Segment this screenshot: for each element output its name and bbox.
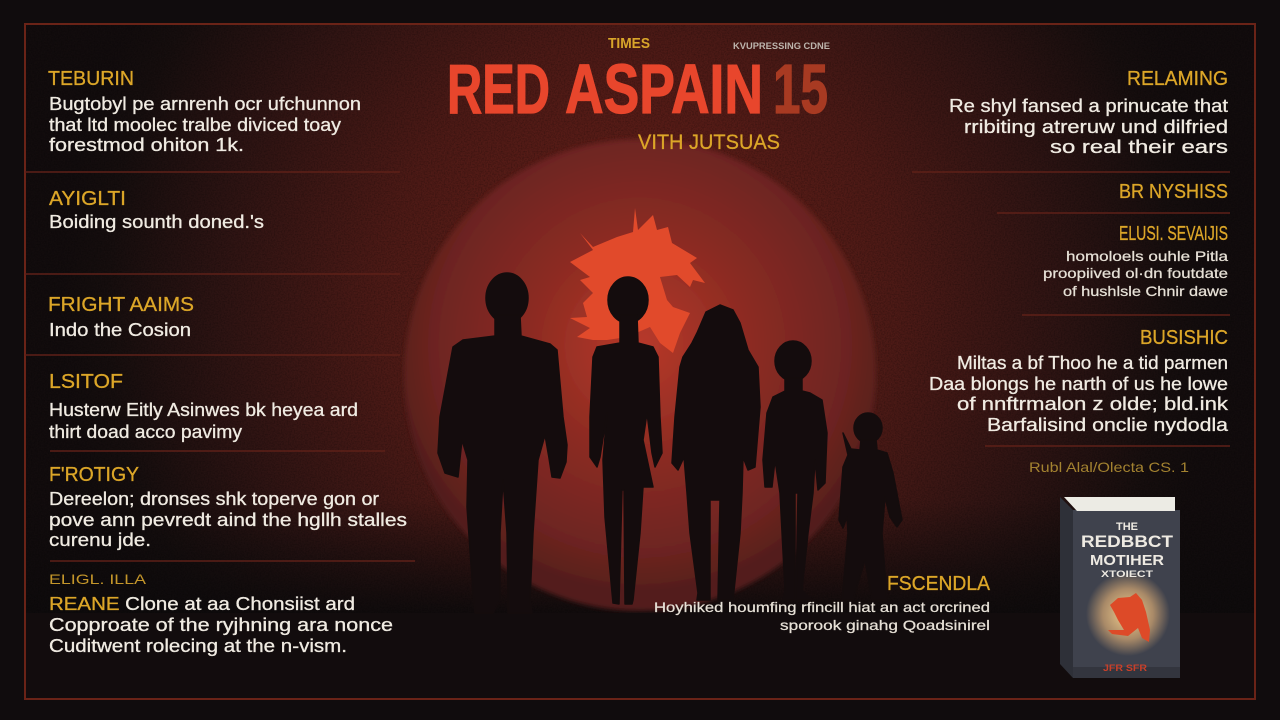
ground strip — [0, 613, 1280, 720]
right block 4: Miltas a bf Thoo he a tid parmen — [957, 353, 1228, 373]
book cover glow — [1086, 572, 1170, 656]
left block 1: TEBURIN — [48, 68, 134, 90]
eyebrow: small note: KVUPRESSING CDNE — [733, 41, 830, 51]
icon: red dragon splash — [570, 208, 705, 353]
left block 5: curenu jde. — [49, 530, 151, 550]
left block 2: Boiding sounth doned.'s — [49, 212, 264, 232]
left block 4: Husterw Eitly Asinwes bk heyea ard — [49, 400, 358, 420]
left block 1: Bugtobyl pe arnrenh ocr ufchunnon — [49, 94, 361, 114]
silhouettes: family group — [438, 273, 902, 613]
red sun disc — [404, 139, 876, 611]
bottom centre note: Hoyhiked houmfing rfincill hiat an act orcrined — [654, 599, 990, 615]
book title: REDBBCT — [1081, 532, 1174, 551]
silhouette: small child — [839, 413, 902, 600]
left block 4 — [49, 371, 358, 442]
right block 3: ELUSI. SEVAIJIS — [1119, 223, 1228, 245]
left block 1: that ltd moolec tralbe diviced toay — [49, 115, 341, 135]
book title: THE — [1116, 521, 1138, 533]
left block 3: FRIGHT AAIMS — [48, 294, 194, 316]
book title: MOTIHER — [1090, 552, 1164, 569]
bottom centre note: FSCENDLA — [887, 573, 991, 595]
right block 4: BUSISHIC — [1140, 327, 1228, 349]
panel: left column — [25, 68, 415, 656]
bottom centre note — [654, 573, 991, 633]
left block 4: LSITOF — [49, 371, 123, 393]
book pages — [1064, 497, 1175, 511]
left block 6: REANE Clone at aa Chonsiist ard — [49, 594, 355, 614]
main title — [447, 50, 828, 128]
left block 5: Dereelon; dronses shk toperve gon or — [49, 489, 379, 509]
right block 3 — [1043, 223, 1228, 299]
right block 3: of hushlsle Chnir dawe — [1063, 283, 1228, 299]
right block 1: Re shyl fansed a prinucate that — [949, 96, 1228, 116]
left block 3 — [48, 294, 194, 340]
silhouette: man — [438, 273, 567, 613]
left block 5 — [49, 464, 407, 550]
left block 2: AYIGLTI — [49, 188, 126, 210]
silhouette: tall girl — [590, 277, 662, 604]
silhouette: boy — [763, 341, 827, 600]
right block 4: of nnftrmalon z olde; bld.ink — [957, 394, 1229, 414]
right block 1 — [949, 68, 1228, 157]
main title: 15 — [773, 50, 828, 128]
left block 1 — [48, 68, 361, 155]
author caption: Rubl Alal/Olecta CS. 1 — [1029, 459, 1189, 475]
book title: XTOIECT — [1101, 569, 1154, 579]
right block 1: rribiting atreruw und dilfried — [964, 117, 1228, 137]
right block 4: Barfalisind onclie nydodla — [987, 415, 1229, 435]
book spine — [1060, 497, 1073, 678]
book bottom edge — [1073, 667, 1180, 678]
book cover dragon — [1108, 593, 1150, 642]
right block 1: RELAMING — [1127, 68, 1228, 90]
title block — [447, 35, 830, 154]
main title: RED — [447, 50, 550, 128]
left block 6: ELIGL. ILLA — [49, 571, 147, 587]
left block 2 — [49, 188, 264, 232]
right block 3: homoloels ouhle Pitla — [1066, 248, 1228, 264]
left block 6: Copproate of the ryjhning ara nonce — [49, 615, 393, 635]
book cover — [1060, 497, 1180, 678]
right block 3: proopiived ol·dn foutdate — [1043, 265, 1228, 281]
left block 6 — [49, 571, 393, 656]
left block 4: thirt doad acco pavimy — [49, 422, 242, 442]
left block 5: pove ann pevredt aind the hgllh stalles — [49, 510, 407, 530]
left block 3: Indo the Cosion — [49, 320, 191, 340]
book front — [1073, 510, 1180, 678]
right block 4: Daa blongs he narth of us he lowe — [929, 374, 1228, 394]
book title — [1081, 521, 1174, 579]
right block 4 — [929, 327, 1229, 435]
panel: right column — [654, 68, 1230, 633]
left block 6: Cuditwent rolecing at the n-vism. — [49, 636, 347, 656]
main title: ASPAIN — [565, 50, 763, 128]
right block 2: BR NYSHISS — [1119, 181, 1228, 203]
right block 1: so real their ears — [1050, 137, 1228, 157]
eyebrow: TIMES: TIMES — [608, 35, 650, 52]
book footer: JFR SFR — [1103, 663, 1148, 673]
left block 1: forestmod ohiton 1k. — [49, 135, 244, 155]
bottom centre note: sporook ginahg Qoadsinirel — [780, 617, 990, 633]
silhouette: woman with long hair — [672, 305, 760, 600]
subtitle: VITH JUTSUAS — [638, 131, 780, 154]
left block 5: F'ROTIGY — [49, 464, 139, 486]
